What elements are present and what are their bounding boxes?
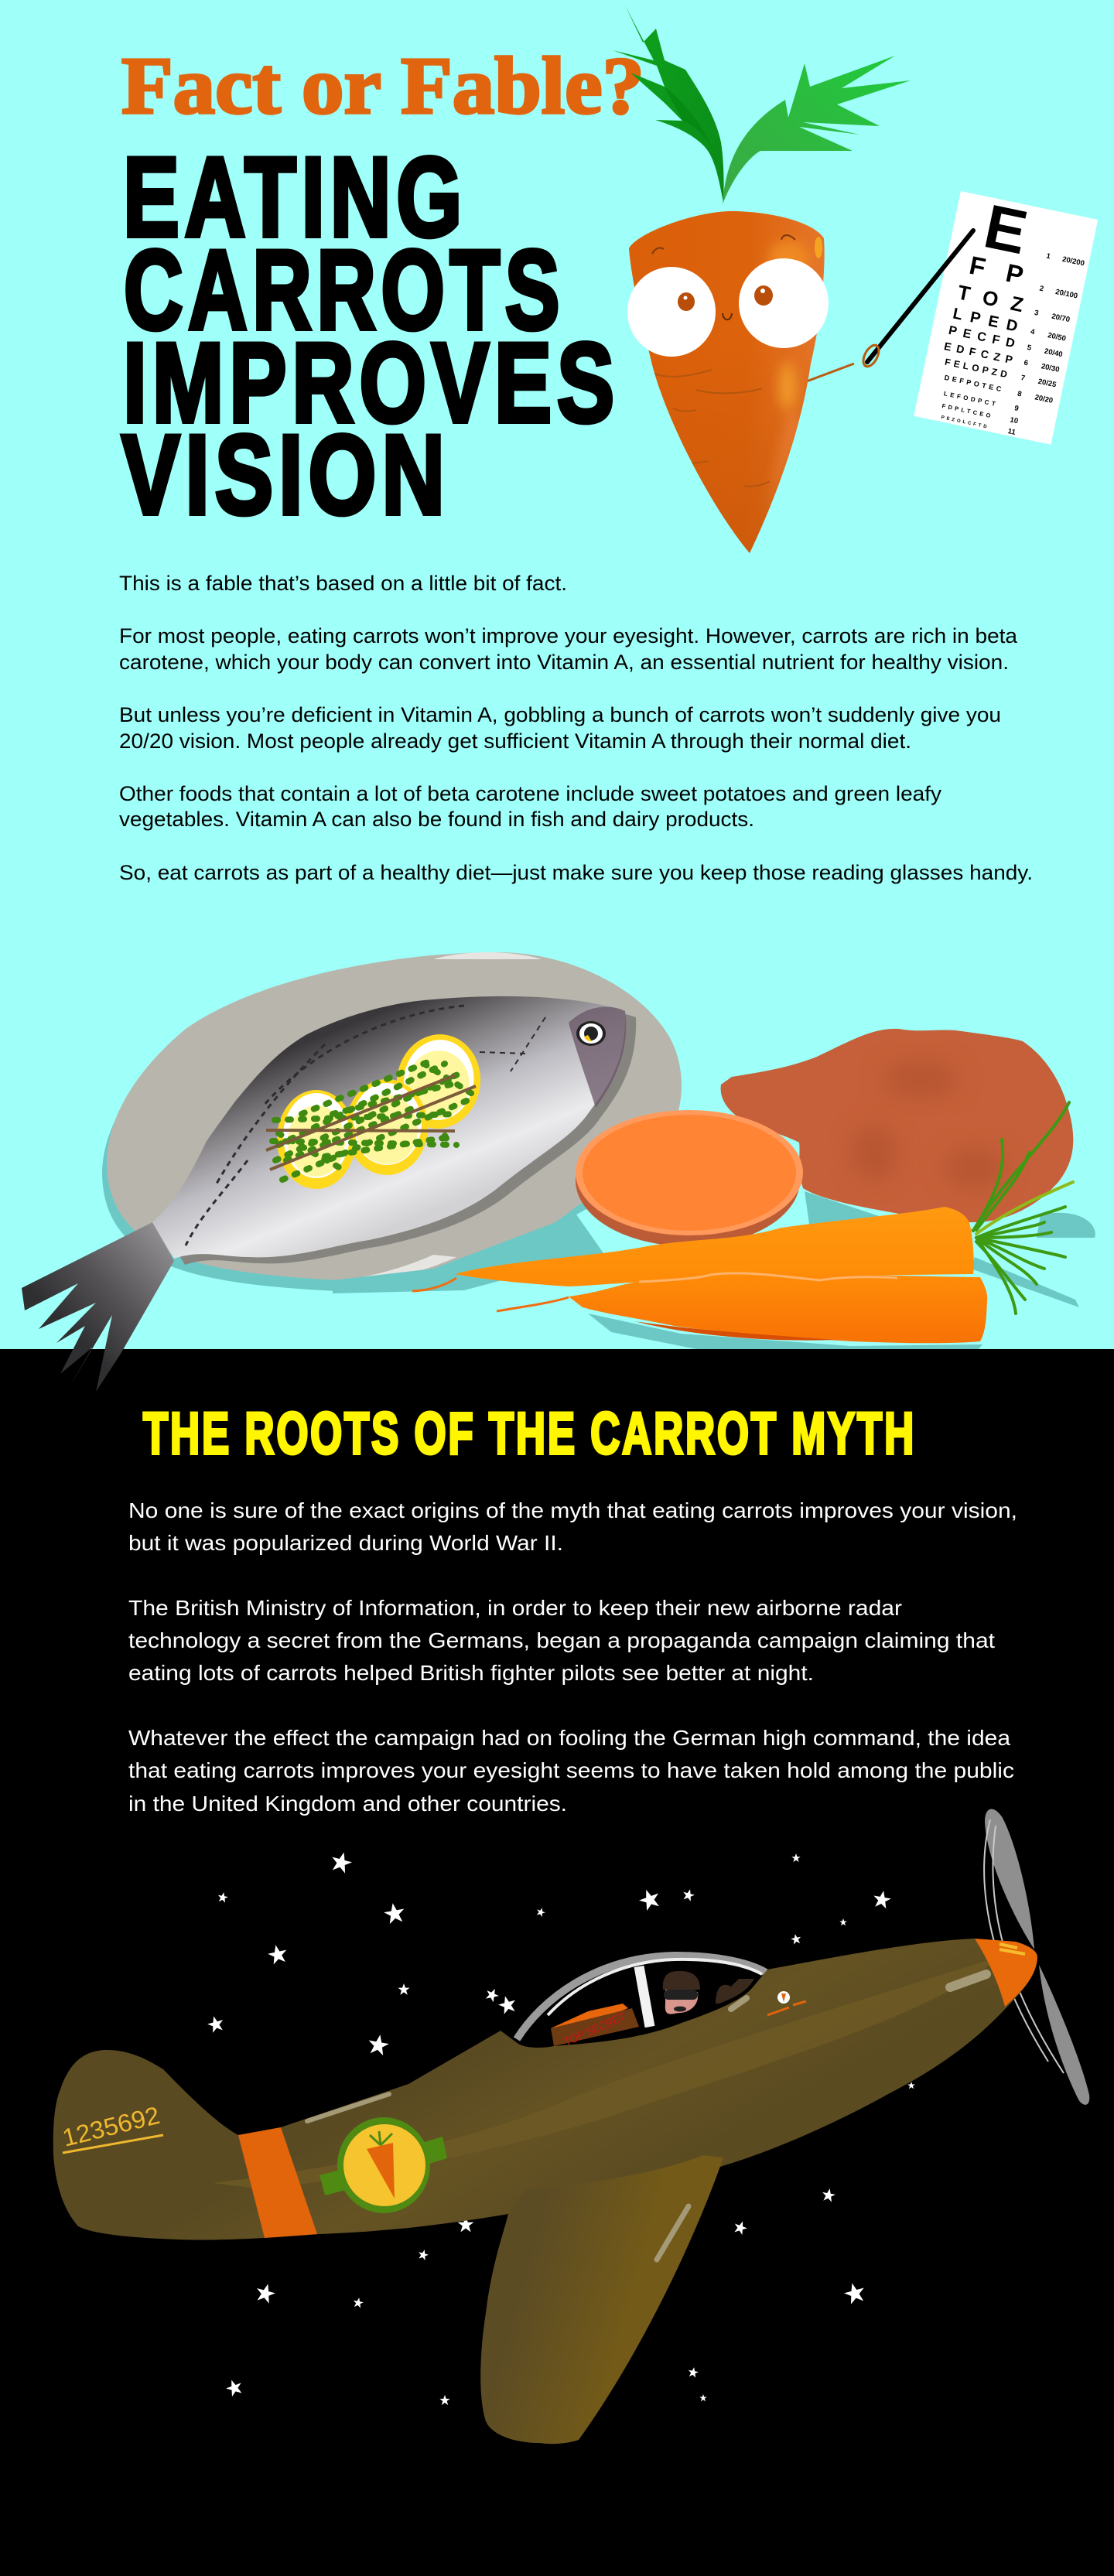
- plane nose cone: [975, 1939, 1037, 2007]
- icon: eye chart: E: [979, 191, 1033, 267]
- icon: eye chart: 9: [1013, 404, 1020, 413]
- icon: eye chart: [914, 185, 1099, 445]
- food shadows: [333, 1191, 1095, 1349]
- lemon slices: [277, 1029, 487, 1189]
- icon: eye chart: LEFODPCT: [943, 390, 996, 408]
- title: Eating carrots improves vision: EATING: [123, 134, 467, 260]
- text block: origin of the myth: that eating carrots improves your eyesight seems to have taken hold among the public: [128, 1758, 1014, 1782]
- plane highlights: [307, 1974, 986, 2260]
- text block: origin of the myth: in the United Kingdom and other countries.: [128, 1792, 567, 1816]
- text block: origin of the myth: Whatever the effect the campaign had on fooling the German high command, the idea: [128, 1726, 1010, 1750]
- icon: eye chart: DEFPOTEC: [944, 374, 1003, 393]
- icon: eye chart: 20/30: [1041, 362, 1060, 374]
- canopy interior: [515, 1955, 767, 2050]
- icon: eye chart: 20/40: [1044, 347, 1063, 359]
- fish tail: [22, 1222, 174, 1392]
- icon: eye chart: 20/50: [1047, 331, 1067, 343]
- title: Eating carrots improves vision: [121, 134, 620, 538]
- orange tail stripe: [238, 2127, 317, 2238]
- text block: fable explanation: So, eat carrots as part of a healthy diet—just make sure you keep those reading glasses handy.: [119, 861, 1033, 884]
- sweet potato slice: [576, 1110, 803, 1246]
- icon: eye chart: 1: [1045, 251, 1052, 261]
- icon: eye chart: PECFD: [948, 324, 1016, 350]
- icon: eye chart: O: [980, 285, 1000, 312]
- icon: eye chart: 4: [1030, 327, 1036, 337]
- plate shadow: [102, 963, 677, 1292]
- text block: fable explanation: This is a fable that’s based on a little bit of fact.: [119, 572, 567, 595]
- icon: eye chart: 6: [1023, 359, 1029, 367]
- sweet potato whole: [721, 1029, 1073, 1222]
- fish head shading: [569, 1006, 626, 1108]
- pilot: [663, 1971, 700, 2014]
- carrot upper: [455, 1207, 974, 1286]
- icon: eye chart: 20/200: [1061, 255, 1085, 268]
- icon: eye chart: 7: [1020, 374, 1026, 383]
- icon: eye chart: 20/70: [1051, 313, 1071, 324]
- text block: origin of the myth: [128, 1498, 1017, 1816]
- canopy frame: [517, 1956, 766, 2039]
- icon: eye chart: 8: [1017, 390, 1023, 398]
- fish eye: [576, 1021, 606, 1046]
- plane light band: [213, 1957, 998, 2189]
- text block: fable explanation: For most people, eating carrots won’t improve your eyesight. However, carrots are rich in beta: [119, 624, 1018, 647]
- icon: eye chart: F: [967, 251, 988, 282]
- icon: right carrot leaves: [723, 56, 911, 204]
- fish shadow: [163, 1003, 636, 1265]
- icon: carrot eyes: [627, 258, 829, 357]
- text block: origin of the myth: No one is sure of the exact origins of the myth that eating carrots improves your vision,: [128, 1498, 1017, 1522]
- icon: eye chart: FDPLTCEO: [941, 402, 991, 419]
- title: Eating carrots improves vision: CARROTS: [124, 227, 565, 353]
- icon: eye chart: 11: [1007, 427, 1017, 437]
- icon: eye chart: 2: [1039, 285, 1044, 293]
- icon: left carrot leaves: [613, 5, 724, 203]
- fish scale marks: [186, 1006, 545, 1245]
- text block: fable explanation: Other foods that contain a lot of beta carotene include sweet potatoes and green leafy: [119, 782, 942, 805]
- text block: origin of the myth: technology a secret from the Germans, began a propaganda campaign claiming that: [128, 1628, 995, 1652]
- plane eye and mouth: [767, 1991, 806, 2015]
- text block: fable explanation: vegetables. Vitamin A can also be found in fish and dairy products.: [119, 808, 754, 831]
- plane wing: [480, 2155, 723, 2444]
- icon: eye chart: FELOPZD: [944, 357, 1009, 380]
- tail number: 1235692: [60, 2101, 162, 2152]
- icon: eye chart: EDFCZP: [943, 340, 1013, 366]
- text block: origin of the myth: but it was popularized during World War II.: [128, 1531, 563, 1555]
- icon: eye chart: P: [1003, 258, 1026, 289]
- carrot lower shade: [634, 1321, 836, 1341]
- nose highlight: [1000, 1944, 1025, 1954]
- illustration: fighter plane: [53, 1809, 1089, 2444]
- text block: fable explanation: But unless you’re deficient in Vitamin A, gobbling a bunch of carrots won’t suddenly give you: [119, 703, 1001, 726]
- roundel with carrot: [320, 2117, 447, 2213]
- text block: origin of the myth: The British Ministry of Information, in order to keep their new airborne radar: [128, 1596, 902, 1620]
- propeller: [984, 1809, 1089, 2105]
- icon: eye chart: PEZOLCFTD: [941, 415, 988, 429]
- illustration: sweet potatoes and carrots: [333, 1029, 1095, 1349]
- panel: bottom black background: [0, 1349, 1114, 2576]
- icon: eye chart: 20/20: [1034, 393, 1054, 405]
- carrot upper root: [412, 1278, 456, 1291]
- icon: eye chart: 10: [1009, 415, 1019, 425]
- plate rim highlight: [341, 952, 542, 1281]
- text block: origin of the myth: eating lots of carrots helped British fighter pilots see better at night.: [128, 1661, 814, 1685]
- carrot greens: [973, 1102, 1073, 1314]
- carrot lower root: [497, 1297, 569, 1311]
- icon: eye chart: 20/25: [1037, 378, 1058, 390]
- text block: fable explanation: carotene, which your body can convert into Vitamin A, an essential nutrient for healthy vision.: [119, 651, 1009, 674]
- carrot lower detail: [639, 1273, 897, 1282]
- dog passenger: [716, 1979, 754, 2004]
- fish body: [152, 996, 625, 1259]
- plane fuselage: [53, 1939, 1037, 2240]
- illustration: fish on a plate: [22, 952, 682, 1392]
- title: Eating carrots improves vision: IMPROVES: [123, 319, 620, 446]
- icon: eye chart: LPED: [952, 306, 1019, 335]
- illustration: carrot character with eye chart: [613, 5, 1099, 553]
- icon: eye chart: 3: [1034, 309, 1040, 318]
- icon: eye chart: Z: [1009, 292, 1026, 316]
- crate of carrots: TOP SECRET: [562, 2011, 627, 2049]
- icon: eye chart: 5: [1027, 343, 1033, 353]
- text block: fable explanation: [119, 572, 1033, 884]
- text block: fable explanation: 20/20 vision. Most people already get sufficient Vitamin A through their normal diet.: [119, 729, 911, 753]
- carrot lower: [569, 1273, 987, 1343]
- eyebrow: Fact or Fable?: Fact or Fable?: [121, 40, 644, 131]
- sweet potato texture: [851, 1061, 1006, 1188]
- carrot highlights: [652, 235, 822, 518]
- stars in night sky: [206, 1850, 915, 2405]
- icon: eye chart: 20/100: [1054, 288, 1078, 301]
- icon: eye chart: T: [955, 280, 972, 306]
- panel: top cyan background: [0, 0, 1114, 1349]
- title: Eating carrots improves vision: VISION: [121, 412, 450, 538]
- icon: carrot body: [629, 211, 825, 553]
- carrot lower shading: [629, 211, 825, 553]
- plate: [107, 952, 682, 1281]
- icon: carrot arm and pointer: [805, 231, 973, 382]
- herb sprigs: [266, 1060, 476, 1180]
